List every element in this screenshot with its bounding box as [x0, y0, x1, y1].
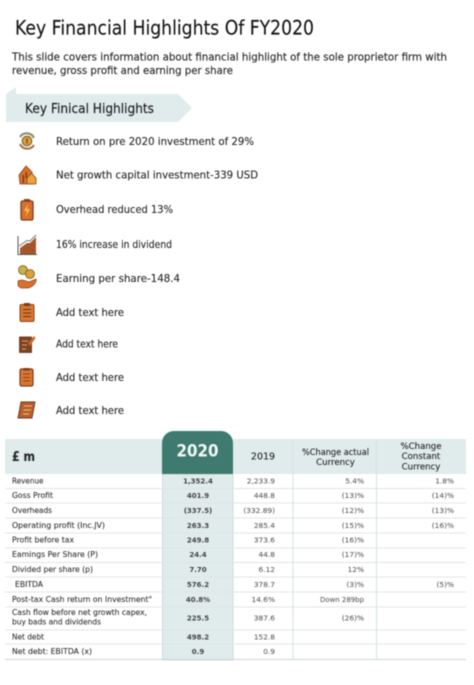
change actual currency values: (3)% — [346, 580, 364, 589]
item: add text 3: Add text here — [56, 371, 124, 384]
row labels: Operating profit (Inc.JV) — [12, 521, 105, 530]
change actual currency values: (13)% — [342, 491, 364, 500]
change actual currency values: (12)% — [342, 506, 364, 515]
row labels: Divided per share (p) — [12, 565, 93, 574]
change actual currency values: 12% — [348, 565, 364, 574]
row labels: Goss Profit — [12, 491, 53, 500]
row labels: EBITDA — [15, 580, 44, 589]
2019 values: 2,233.9 — [247, 476, 275, 486]
2019 values: 448.8 — [254, 491, 275, 500]
row labels: Net debt — [12, 632, 44, 642]
change actual currency values: (16)% — [342, 536, 364, 544]
financial table — [5, 431, 466, 660]
item: add text 2: Add text here — [56, 338, 118, 350]
2019 values: 373.6 — [254, 536, 275, 544]
highlights list — [18, 133, 258, 418]
2020 values: 498.2 — [187, 634, 209, 642]
subtitle text block — [11, 52, 447, 77]
2019 values: 6.12 — [259, 565, 275, 574]
item: increase in dividend: 16% increase in dividend — [56, 238, 172, 251]
item: add text 1 — [20, 303, 124, 322]
header labels — [12, 442, 442, 472]
item: add text 2 — [20, 336, 118, 352]
change actual currency values: Down 289bp — [320, 595, 364, 604]
item: add text 4 — [18, 402, 124, 418]
item: add text 4: Add text here — [56, 404, 124, 417]
2020 values: 24.4 — [189, 551, 207, 559]
row labels — [12, 476, 152, 656]
item: add text 1: Add text here — [56, 306, 124, 319]
change constant currency values: (16)% — [432, 521, 454, 530]
change actual currency values — [320, 476, 364, 622]
2020 values: 576.2 — [187, 581, 209, 589]
2020 values: 263.3 — [187, 522, 209, 530]
change actual currency values: (15)% — [342, 521, 364, 530]
row labels: Net debt: EBITDA (x) — [12, 647, 92, 656]
item: add text 3 — [20, 368, 124, 386]
item: earning per share: Earning per share-148.4 — [56, 272, 180, 285]
banner: Key Finical Highlights — [6, 87, 192, 122]
change constant currency values: (13)% — [432, 506, 454, 515]
2020 column highlight — [162, 474, 233, 660]
header labels: %Change — [400, 442, 442, 452]
header labels: Currency — [402, 462, 440, 472]
row labels: Cash flow before net growth capex, — [12, 608, 147, 617]
header labels: Currency — [316, 458, 355, 468]
2020 values: 7.70 — [189, 566, 207, 574]
change actual currency values: (17)% — [342, 550, 364, 559]
change constant currency values — [432, 476, 454, 589]
row labels: Eamings Per Share (P) — [12, 550, 98, 559]
row labels: Revenue — [12, 476, 44, 486]
2020 values: 225.5 — [187, 614, 209, 622]
2019 values: 387.6 — [254, 614, 275, 622]
2019 values: (332.89) — [243, 506, 275, 515]
item: earning per share — [18, 266, 180, 288]
change constant currency values: 1.8% — [435, 476, 454, 486]
2020 values — [183, 478, 213, 656]
row labels: buy bads and dividends — [12, 618, 101, 626]
2020 header tab: 2020 — [176, 442, 218, 460]
2020 values: 0.9 — [192, 648, 204, 656]
header labels: £ m — [12, 450, 35, 465]
subtitle text block: This slide covers information about financial highlight of the sole proprietor firm with — [11, 52, 447, 64]
2020 values: 401.9 — [187, 492, 209, 500]
2020 header tab — [162, 431, 233, 474]
change constant currency values: (14)% — [432, 491, 454, 500]
2019 values: 44.8 — [259, 550, 275, 559]
banner: Key Finical Highlights: Key Finical Highlights — [25, 102, 154, 117]
header labels: 2019 — [251, 452, 275, 462]
item: overhead reduced — [21, 199, 173, 220]
header labels: %Change actual — [302, 448, 369, 458]
row labels: Profit before tax — [12, 536, 74, 544]
item: return on investment: Return on pre 2020 investment of 29% — [56, 135, 254, 148]
2019 values: 378.7 — [254, 580, 275, 589]
subtitle text block: revenue, gross profit and earning per share — [12, 66, 233, 77]
item: increase in dividend — [18, 235, 172, 254]
2020 values: (337.5) — [184, 507, 212, 515]
2020 values: 40.8% — [186, 596, 210, 604]
row labels: Post-tax Cash return on Investment" — [12, 595, 152, 604]
header labels: Constant — [402, 452, 441, 462]
change actual currency values: 5.4% — [345, 476, 364, 486]
table header band — [5, 439, 466, 474]
title: Key Financial Highlights Of FY2020 — [15, 16, 314, 40]
2020 values: 249.8 — [187, 536, 209, 544]
change actual currency values: (26)% — [342, 614, 364, 622]
2019 values: 0.9 — [263, 647, 275, 656]
2019 values: 14.6% — [252, 595, 275, 604]
item: overhead reduced: Overhead reduced 13% — [56, 203, 173, 216]
row labels: Overheads — [12, 506, 52, 515]
item: net growth capital: Net growth capital investment-339 USD — [56, 168, 258, 182]
2019 values: 152.8 — [254, 632, 275, 642]
2020 values: 1,352.4 — [183, 478, 213, 486]
change constant currency values: (5)% — [436, 580, 454, 589]
item: net growth capital — [19, 166, 258, 184]
item: return on investment — [20, 133, 254, 149]
2019 values: 285.4 — [254, 521, 275, 530]
2019 values — [243, 476, 275, 656]
